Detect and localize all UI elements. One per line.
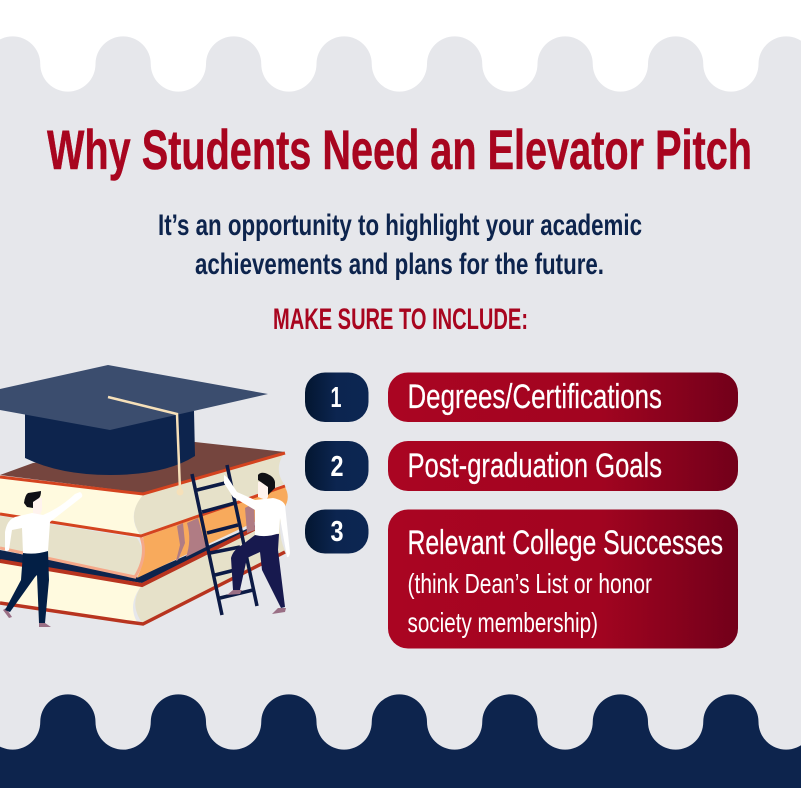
item 2 (305, 441, 738, 491)
middle book (0, 487, 288, 578)
subtitle (158, 209, 642, 281)
subtitle: achievements and plans for the future. (195, 248, 604, 281)
footer navy scalloped band (0, 694, 801, 788)
bottom book (0, 510, 285, 624)
item 3 (305, 510, 738, 648)
illustration: books, graduation cap and students (0, 365, 290, 627)
section heading: MAKE SURE TO INCLUDE: (273, 303, 528, 336)
label panel 3: (think Dean’s List or honor (408, 568, 652, 599)
student left (3, 491, 82, 627)
label panel 3: society membership) (408, 607, 598, 638)
number badge 3: 3 (330, 516, 344, 548)
label bar 1: Degrees/Certifications (408, 378, 662, 416)
subtitle: It’s an opportunity to highlight your academic (158, 209, 642, 242)
student right (224, 473, 290, 614)
number badge 1 (305, 372, 368, 422)
graduation cap (0, 365, 268, 496)
ladder (192, 465, 257, 615)
top book (0, 442, 285, 536)
number badge 1: 1 (330, 382, 342, 414)
number badge 2 (305, 441, 368, 491)
label bar 2: Post-graduation Goals (408, 447, 662, 485)
number badge 3 (305, 510, 368, 554)
number badge 2: 2 (330, 451, 344, 483)
label panel 3 (388, 510, 738, 648)
item 1 (305, 372, 738, 422)
